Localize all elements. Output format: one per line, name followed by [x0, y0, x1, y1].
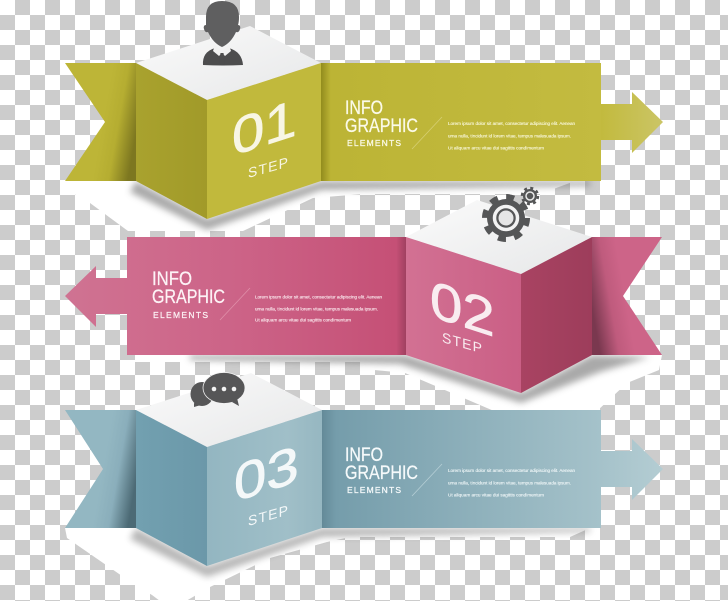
cube left face [136, 410, 207, 566]
number 01: 01 [232, 89, 297, 168]
body text: urna nulla, tincidunt id lorem vitae, tempus malesuada ipsum. [448, 480, 571, 486]
panel: step 03 [65, 372, 663, 601]
arrow [65, 266, 128, 327]
body text: Ut aliquam arcu vitae dui sagittis condimentum [448, 492, 544, 498]
body text: Lorem ipsum dolor sit amet, consectetur adipiscing elit. Aenean [448, 121, 575, 127]
body text: Ut aliquam arcu vitae dui sagittis condimentum [255, 318, 351, 324]
heading: GRAPHIC [152, 287, 225, 308]
heading: INFO [152, 269, 192, 290]
arrow [600, 92, 663, 153]
cube right face [207, 63, 321, 219]
heading: ELEMENTS [153, 310, 208, 320]
heading [345, 98, 418, 148]
heading: GRAPHIC [345, 116, 418, 137]
shadow under step 01 [65, 181, 590, 231]
ribbon tail [592, 237, 662, 355]
heading: INFO [345, 98, 383, 119]
number 02: 02 [430, 270, 495, 349]
step label: STEP [248, 503, 288, 530]
body text: urna nulla, tincidunt id lorem vitae, tempus malesuada ipsum. [448, 134, 571, 140]
cube top [136, 373, 322, 447]
ribbon tail [65, 410, 136, 528]
ribbon tail [65, 63, 136, 181]
ribbon band [127, 237, 406, 355]
step label: STEP [442, 330, 482, 357]
shadow under step 02 [135, 355, 662, 411]
number 03: 03 [234, 435, 299, 514]
ribbon band [321, 63, 601, 181]
heading [152, 269, 225, 320]
heading: ELEMENTS [347, 485, 401, 495]
cube right face [207, 410, 322, 566]
icon: speech bubbles [190, 372, 245, 407]
shadow under step 03 [65, 528, 590, 601]
body text: urna nulla, tincidunt id lorem vitae, tempus malesuada ipsum. [255, 306, 378, 312]
body text: Lorem ipsum dolor sit amet, consectetur adipiscing elit. Aenean [448, 468, 575, 474]
panel: step 02 [65, 188, 662, 411]
arrow [600, 439, 663, 500]
body text: Ut aliquam arcu vitae dui sagittis condimentum [448, 146, 544, 152]
body text: Lorem ipsum dolor sit amet, consectetur adipiscing elit. Aenean [255, 294, 382, 300]
step label: STEP [248, 155, 288, 182]
icon: gears [485, 188, 538, 239]
heading: INFO [345, 445, 383, 466]
cube left face [136, 63, 207, 219]
panel: step 01 [65, 1, 663, 231]
cube right face [521, 237, 592, 393]
body text [448, 468, 575, 498]
heading: ELEMENTS [347, 138, 401, 148]
body text [255, 294, 382, 324]
heading [345, 445, 418, 495]
body text [448, 121, 575, 152]
cube left face [406, 237, 521, 393]
heading: GRAPHIC [345, 463, 418, 484]
cube top [136, 26, 321, 100]
icon: businessman [203, 1, 243, 66]
cube top [406, 200, 592, 274]
ribbon band [322, 410, 601, 528]
